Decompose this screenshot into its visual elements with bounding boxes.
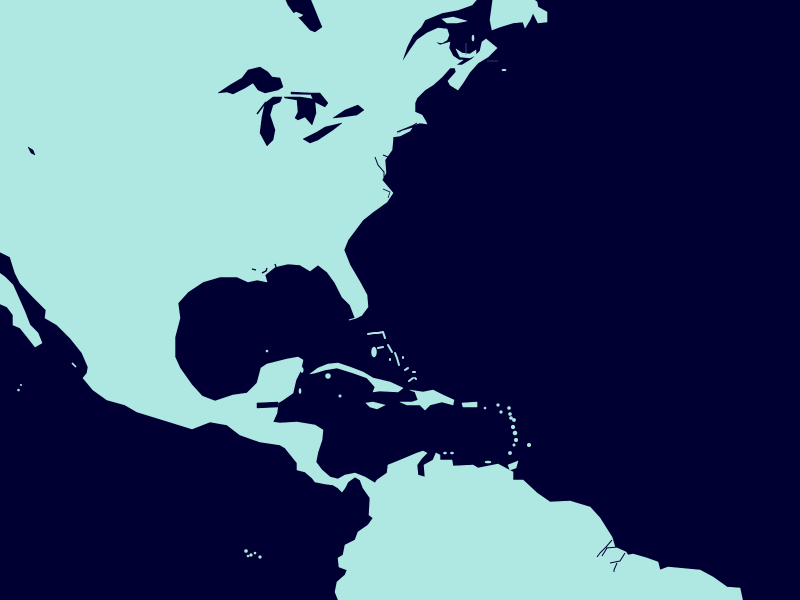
Baja California bbox=[0, 272, 42, 347]
Trinidad bbox=[508, 461, 518, 470]
Lesser Antilles bbox=[497, 404, 499, 406]
small islands bbox=[18, 35, 531, 558]
Green Bay bbox=[257, 102, 266, 114]
Cozumel and cays bbox=[299, 388, 301, 394]
Newfoundland bbox=[490, 0, 547, 30]
Long Island bbox=[393, 128, 412, 137]
Bahamas bbox=[368, 332, 416, 381]
Cuba bbox=[310, 363, 403, 392]
Long Island Sound bbox=[397, 123, 417, 132]
Hispaniola bbox=[400, 390, 454, 410]
Prince Edward Island bbox=[456, 49, 476, 58]
Lake Huron bbox=[284, 92, 328, 125]
Lake Erie bbox=[303, 123, 342, 143]
Jamaica bbox=[366, 402, 385, 409]
Magdalen and Sable islands bbox=[472, 35, 474, 41]
Lake Ontario bbox=[333, 105, 364, 118]
Chesapeake and Delaware bays bbox=[375, 157, 384, 178]
Pamlico Sound bbox=[383, 189, 390, 198]
Lake Michigan bbox=[260, 97, 282, 146]
Anticosti Island bbox=[442, 17, 467, 23]
Dutch Antilles and Margarita bbox=[444, 452, 446, 454]
Tres Marias and Revillagigedo bbox=[72, 363, 76, 367]
James Bay bbox=[285, 0, 322, 32]
Puerto Rico bbox=[462, 402, 477, 407]
Akimiski Island bbox=[291, 12, 303, 17]
Andros Island bbox=[372, 347, 376, 357]
water bodies on land bbox=[28, 0, 625, 572]
Lake Superior bbox=[218, 67, 283, 94]
Thin chart lines bbox=[466, 43, 498, 61]
Yucatan strait rectangle bbox=[257, 402, 278, 408]
Amazon delta channels bbox=[597, 540, 625, 572]
Great Slave spot bbox=[28, 147, 35, 155]
Isle of Youth and Caymans bbox=[326, 374, 330, 378]
Florida Keys bbox=[349, 315, 362, 320]
Galapagos bbox=[244, 550, 248, 552]
Mississippi delta marshes bbox=[252, 264, 276, 273]
